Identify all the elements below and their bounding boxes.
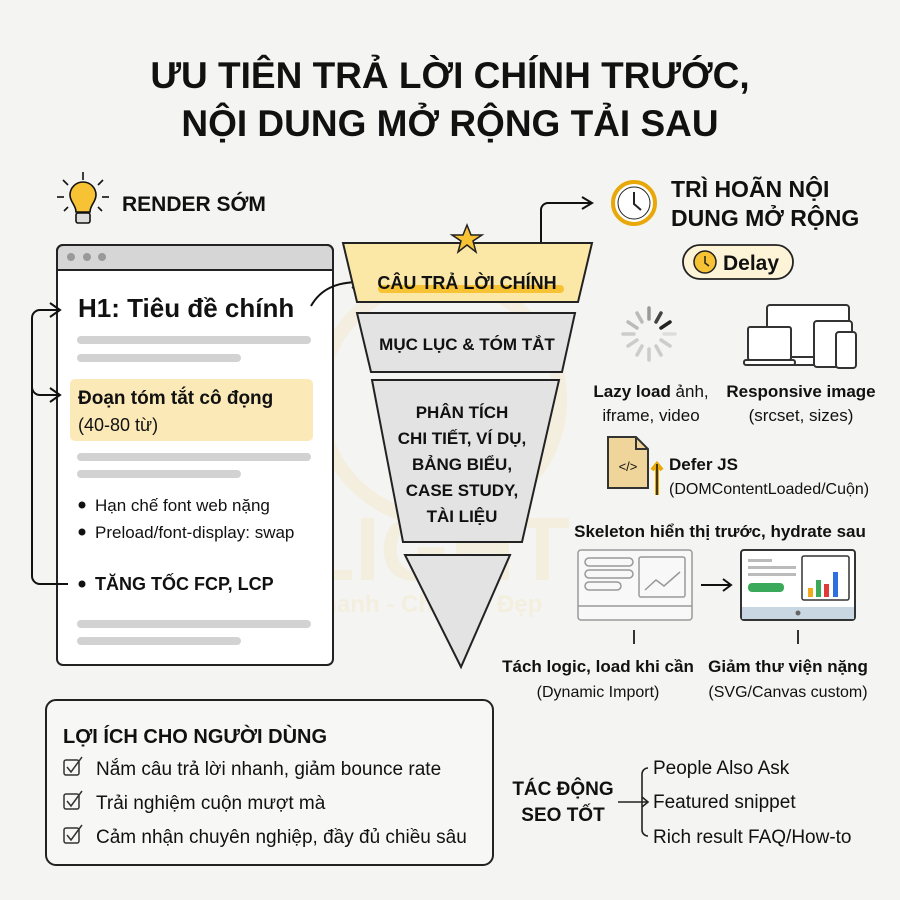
text block: dynamic import: Tách logic, load khi cần — [502, 657, 694, 676]
arrow: seo bracket — [618, 768, 648, 836]
funnel: details — [372, 380, 559, 542]
text block: defer js: (DOMContentLoaded/Cuộn) — [669, 481, 869, 498]
badge: delay: Delay — [723, 252, 779, 275]
text block: seo results: Featured snippet — [653, 792, 796, 813]
text block: summary: (40-80 từ) — [78, 415, 158, 435]
text block: dynamic import: (Dynamic Import) — [537, 684, 659, 701]
badge: delay — [683, 245, 793, 279]
funnel: tip — [405, 555, 510, 667]
funnel: details: TÀI LIỆU — [427, 507, 497, 526]
text block: lazy load: Lazy load ảnh, — [593, 382, 709, 401]
title: ƯU TIÊN TRẢ LỜI CHÍNH TRƯỚC, — [150, 54, 750, 96]
text block: font tips: Hạn chế font web nặng — [95, 496, 270, 515]
text block: font tips — [78, 496, 294, 542]
heading: H1: H1: Tiêu đề chính — [78, 293, 294, 323]
heading: delayed content: DUNG MỞ RỘNG — [671, 203, 859, 231]
text block: seo impact: TÁC ĐỘNG — [512, 778, 614, 800]
icon: hydrated screen — [741, 550, 855, 620]
watermark: Nhanh - Chuẩn - Đẹp — [305, 591, 542, 618]
text block: seo results: Rich result FAQ/How-to — [653, 827, 852, 848]
funnel: toc: MỤC LỤC & TÓM TẮT — [379, 335, 555, 354]
panel: browser mockup — [57, 245, 333, 665]
text block: FCP LCP: TĂNG TỐC FCP, LCP — [95, 573, 274, 594]
title — [150, 54, 750, 144]
arrow: to delayed — [541, 197, 592, 242]
icon: skeleton screen — [578, 550, 692, 620]
funnel: details: CASE STUDY, — [406, 481, 518, 500]
funnel: details: PHÂN TÍCH — [416, 403, 508, 422]
icon: devices — [744, 305, 856, 368]
icon: js file: </> — [619, 459, 637, 474]
icon: spinner — [623, 308, 675, 360]
panel: user benefits: Cảm nhận chuyên nghiệp, đầy đủ chiều sâu — [96, 827, 467, 848]
text block: responsive: (srcset, sizes) — [749, 406, 853, 425]
text block: seo results — [653, 758, 852, 848]
watermark: LIGHT — [300, 500, 570, 600]
text block: lighter libs: (SVG/Canvas custom) — [708, 684, 868, 701]
text block: defer js — [669, 455, 869, 498]
funnel: details: CHI TIẾT, VÍ DỤ, — [398, 429, 526, 448]
heading: delayed content — [671, 175, 859, 231]
text block: lighter libs: Giảm thư viện nặng — [708, 657, 868, 676]
heading: delayed content: TRÌ HOÃN NỘI — [671, 175, 829, 202]
title: NỘI DUNG MỞ RỘNG TẢI SAU — [181, 102, 719, 144]
icon: js file — [608, 437, 662, 495]
text block: summary — [70, 379, 313, 441]
funnel — [343, 225, 592, 667]
text block: summary: Đoạn tóm tắt cô đọng — [78, 387, 273, 409]
text block: seo impact: SEO TỐT — [521, 804, 605, 826]
arrow: H1 to answer — [311, 276, 362, 306]
funnel: answer — [343, 243, 592, 302]
heading: skeleton: Skeleton hiển thị trước, hydrate sau — [574, 522, 866, 541]
funnel: toc — [357, 313, 575, 372]
panel: user benefits — [46, 700, 493, 865]
text block: defer js: Defer JS — [669, 455, 738, 474]
panel: user benefits: Nắm câu trả lời nhanh, giảm bounce rate — [96, 758, 441, 780]
arrow: loop left — [32, 303, 68, 584]
heading: render sớm: RENDER SỚM — [122, 192, 266, 216]
funnel: answer: CÂU TRẢ LỜI CHÍNH — [377, 272, 557, 293]
text block: responsive — [726, 382, 876, 425]
text block: lighter libs — [708, 657, 868, 701]
icon: clock — [613, 182, 655, 224]
text block: seo results: People Also Ask — [653, 758, 790, 779]
text block: responsive: Responsive image — [726, 382, 876, 401]
funnel: details: BẢNG BIỂU, — [412, 455, 512, 474]
arrow: skeleton to hydrate — [701, 579, 731, 591]
watermark — [300, 280, 570, 618]
text block: lazy load — [593, 382, 709, 425]
panel: user benefits: Trải nghiệm cuộn mượt mà — [96, 793, 326, 814]
text block: lazy load: iframe, video — [602, 406, 700, 425]
panel: user benefits: LỢI ÍCH CHO NGƯỜI DÙNG — [63, 724, 327, 748]
text block: seo impact — [512, 778, 614, 826]
icon: star — [452, 225, 482, 252]
text block: font tips: Preload/font-display: swap — [95, 523, 294, 542]
text block: dynamic import — [502, 657, 694, 701]
icon: lightbulb — [57, 172, 109, 223]
